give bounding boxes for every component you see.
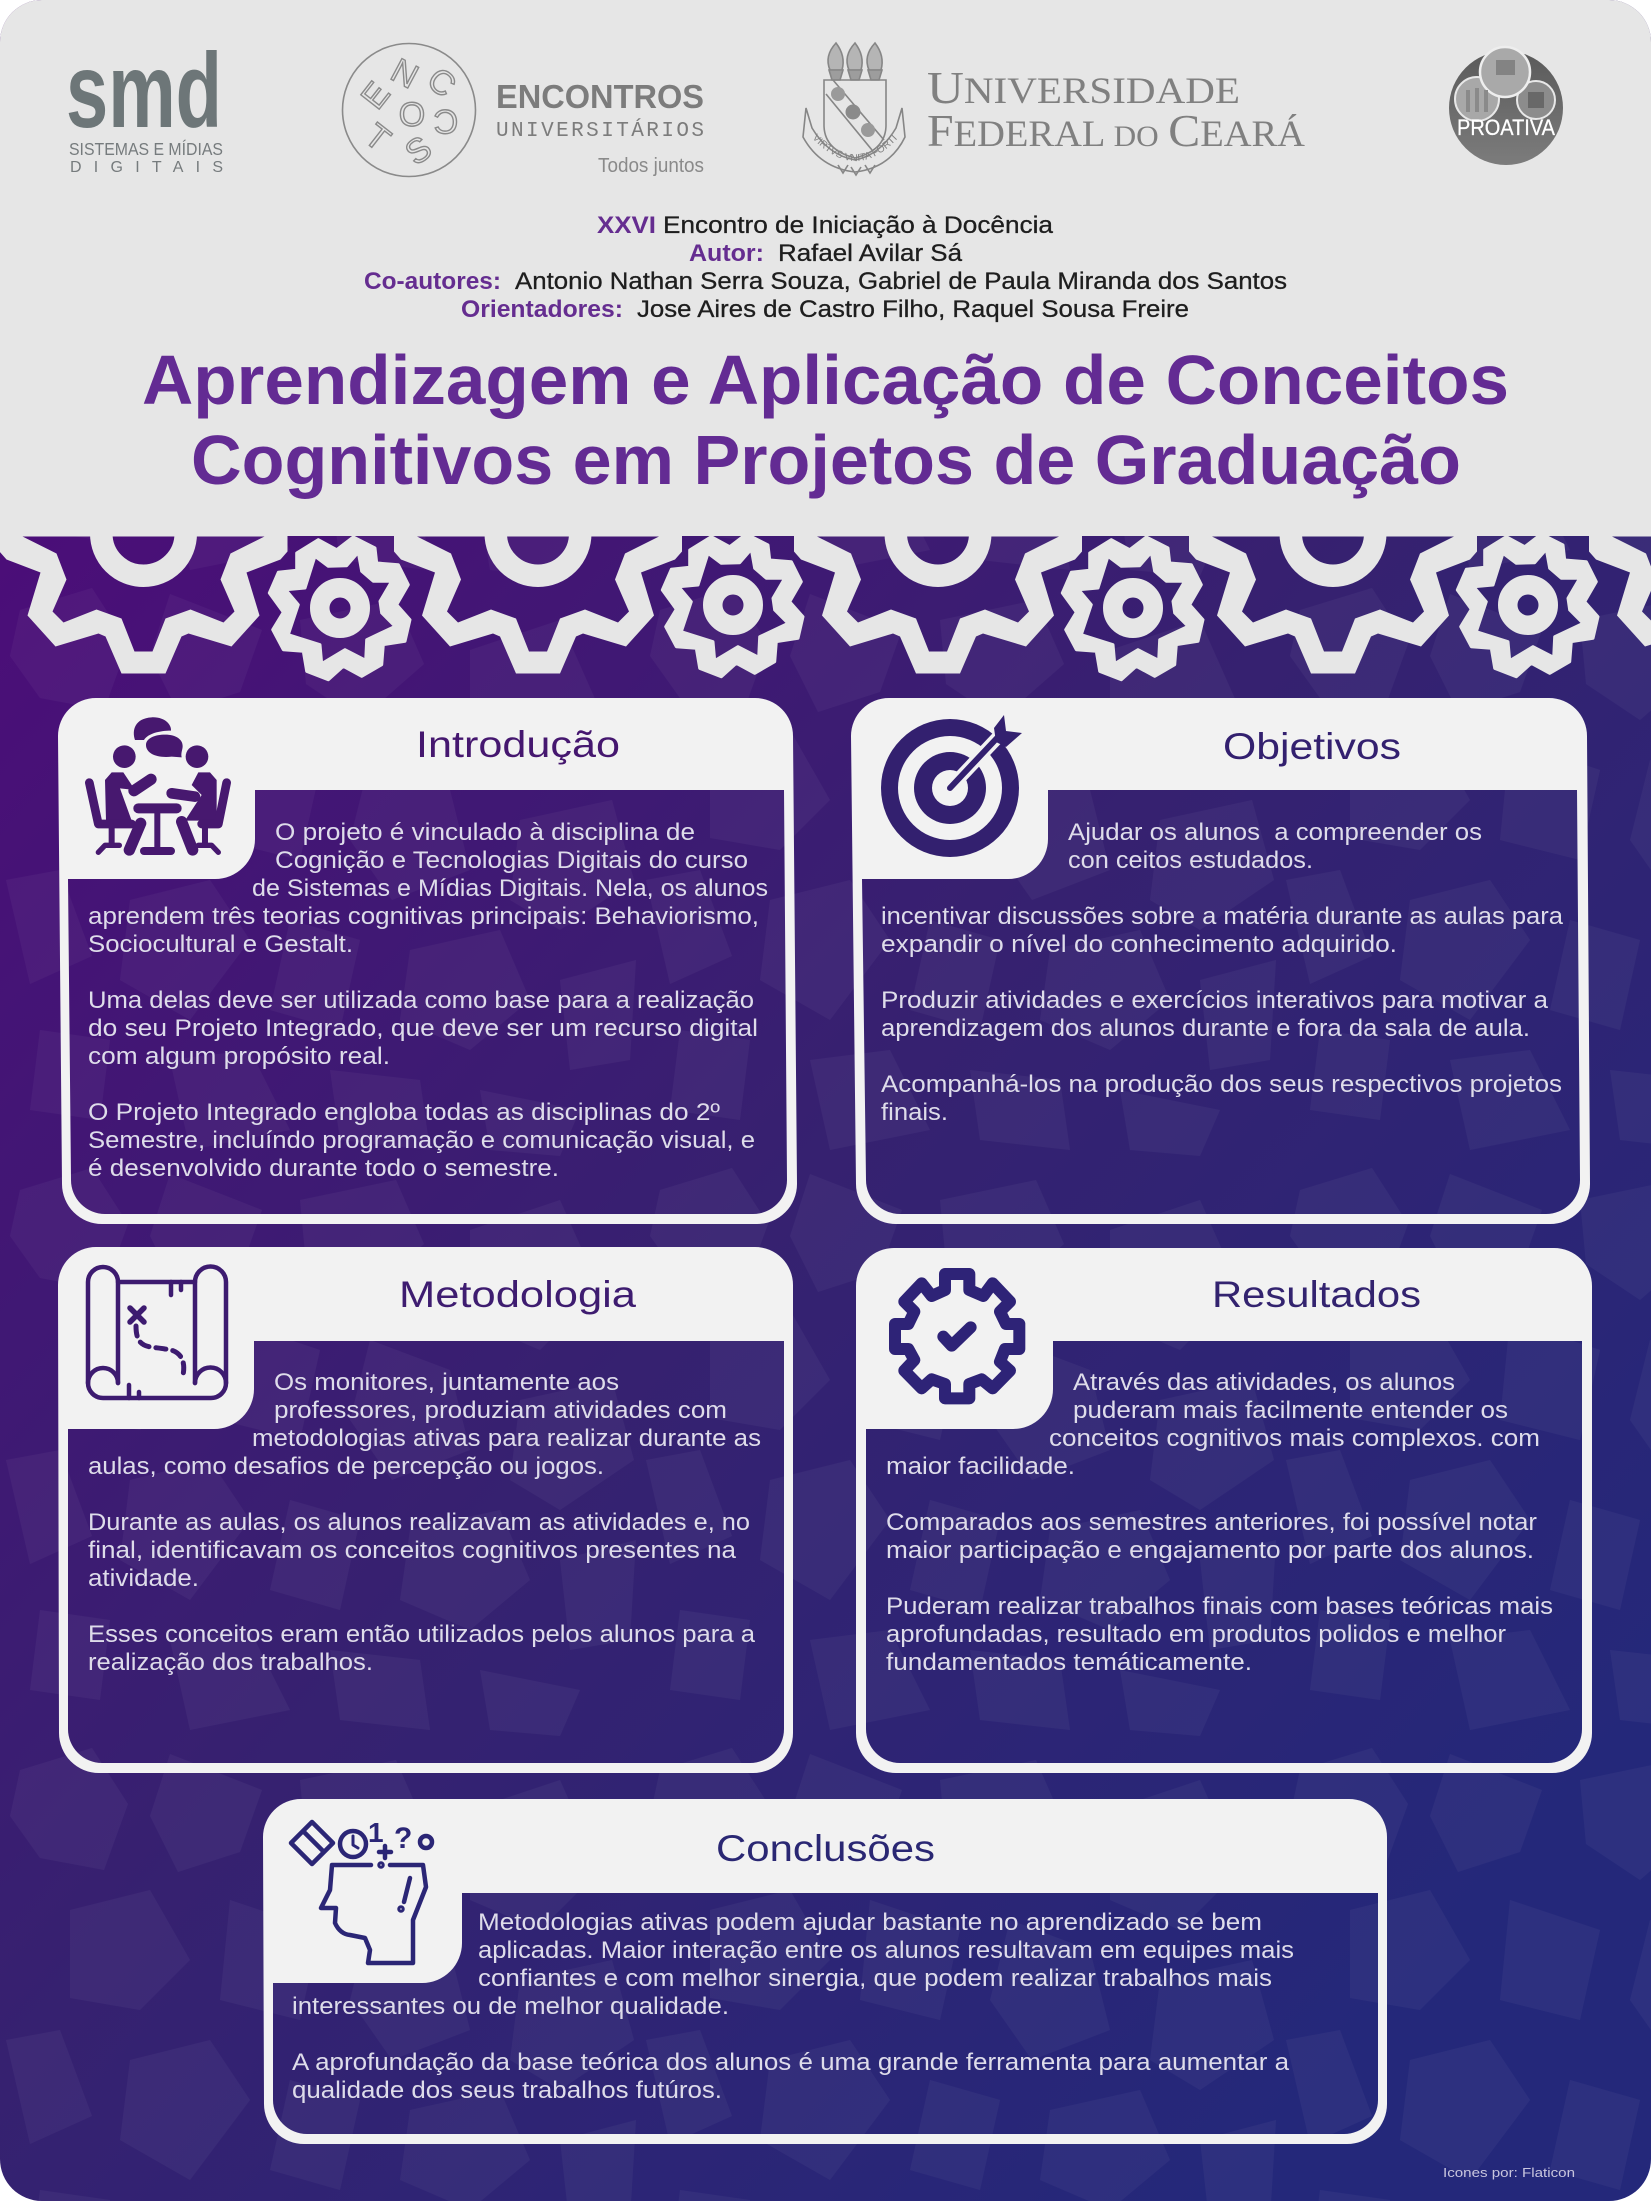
panel: Conclusões [263, 1799, 1387, 2144]
title: Cognitivos em Projetos de Graduação [191, 421, 1461, 499]
heading: Resultados: Resultados [1212, 1274, 1421, 1315]
footer credit: Icones por: Flaticon [1443, 2165, 1575, 2180]
icon: target with arrow [881, 715, 1022, 857]
title [142, 341, 1509, 499]
text: Metodologia body: atividade. [88, 1565, 199, 1592]
text: Resultados body: maior participação e engajamento por parte dos alunos. [886, 1537, 1534, 1564]
icon: head with ideas [291, 1817, 432, 1963]
icon: treasure map [88, 1266, 226, 1398]
logo: Encontros Universitários: UNIVERSITÁRIOS [496, 119, 704, 143]
text: Introdução body: Sociocultural e Gestalt. [88, 931, 353, 958]
text: Resultados body: conceitos cognitivos mais complexos. com [1049, 1425, 1540, 1452]
text: Introdução body: O Projeto Integrado engloba todas as disciplinas do 2º [88, 1099, 720, 1126]
panel: Metodologia [58, 1247, 793, 1773]
panel: Objetivos [851, 698, 1590, 1224]
text: Conclusões body: interessantes ou de melhor qualidade. [292, 1993, 729, 2020]
text: Objetivos body: finais. [881, 1099, 948, 1126]
logo: Encontros Universitários: C [420, 60, 463, 105]
logo: Universidade Federal do Ceará wordmark: FEDERAL DO CEARÁ [927, 105, 1305, 156]
text: Conclusões body [292, 1909, 1294, 2104]
text: Objetivos body: Ajudar os alunos a compreender os [1068, 819, 1482, 846]
text: Introdução body [88, 819, 768, 1182]
title: Aprendizagem e Aplicação de Conceitos [142, 341, 1509, 419]
text: Metodologia body [88, 1369, 761, 1676]
logo: Encontros Universitários: S [398, 129, 439, 173]
event and authors: Antonio Nathan Serra Souza, Gabriel de Paula Miranda dos Santos [515, 268, 1287, 295]
event and authors: Orientadores: [461, 296, 623, 323]
text: Resultados body: puderam mais facilmente entender os [1073, 1397, 1508, 1424]
text: Introdução body: é desenvolvido durante todo o semestre. [88, 1155, 559, 1182]
logo: Encontros Universitários: Todos juntos [598, 155, 704, 177]
heading: Metodologia: Metodologia [399, 1274, 636, 1315]
icon: gear with check mark [895, 1274, 1019, 1398]
logo: Proativa: PROATIVA [1457, 115, 1555, 140]
logo: Encontros Universitários: N [385, 51, 424, 96]
text: Introdução body: Cognição e Tecnologias Digitais do curso [275, 847, 748, 874]
text: Objetivos body: aprendizagem dos alunos durante e fora da sala de aula. [881, 1015, 1530, 1042]
text: Objetivos body: Produzir atividades e exercícios interativos para motivar a [881, 987, 1549, 1014]
text: Objetivos body: incentivar discussões sobre a matéria durante as aulas para [881, 903, 1564, 930]
text: Resultados body: Através das atividades, os alunos [1073, 1369, 1455, 1396]
text: Metodologia body: aulas, como desafios de percepção ou jogos. [88, 1453, 604, 1480]
text: Introdução body: aprendem três teorias cognitivas principais: Behaviorismo, [88, 903, 759, 930]
text: Objetivos body: con ceitos estudados. [1068, 847, 1313, 874]
text: Metodologia body: metodologias ativas para realizar durante as [252, 1425, 761, 1452]
text: Metodologia body: professores, produziam atividades com [274, 1397, 727, 1424]
text: Conclusões body: aplicadas. Maior interação entre os alunos resultavam em equipes mais [478, 1937, 1294, 1964]
text: Metodologia body: realização dos trabalhos. [88, 1649, 373, 1676]
event and authors: Co-autores: [364, 268, 501, 295]
text: Conclusões body: Metodologias ativas podem ajudar bastante no aprendizado se bem [478, 1909, 1262, 1936]
logo: SMD: smd [66, 32, 222, 150]
text: Objetivos body: Acompanhá-los na produção dos seus respectivos projetos [881, 1071, 1562, 1098]
event and authors: XXVI [597, 212, 656, 239]
logo: Universidade Federal do Ceará wordmark: UNIVERSIDADE [927, 62, 1240, 113]
text: Metodologia body: final, identificavam os conceitos cognitivos presentes na [88, 1537, 737, 1564]
logo: SMD: DIGITAIS [70, 159, 223, 176]
text: Metodologia body: Esses conceitos eram então utilizados pelos alunos para a [88, 1621, 756, 1648]
logo: UFC crest [802, 42, 906, 176]
heading: Objetivos: Objetivos [1223, 726, 1401, 767]
logo: Encontros Universitários: T [357, 116, 397, 159]
heading: Introdução: Introdução [416, 724, 620, 765]
logo: Universidade Federal do Ceará wordmark [927, 62, 1305, 156]
logo: Encontros Universitários: O [399, 96, 425, 134]
text: Resultados body [886, 1369, 1553, 1676]
icon: people talking at a table [89, 717, 227, 852]
event and authors: Jose Aires de Castro Filho, Raquel Sousa Freire [637, 296, 1189, 323]
text: Metodologia body: Os monitores, juntamente aos [274, 1369, 619, 1396]
text: Introdução body: Semestre, incluíndo programação e comunicação visual, e [88, 1127, 755, 1154]
logo: Proativa [1449, 47, 1563, 165]
text: Resultados body: fundamentados temáticamente. [886, 1649, 1252, 1676]
logo: SMD: SISTEMAS E MÍDIAS [69, 139, 223, 159]
text: Metodologia body: Durante as aulas, os alunos realizavam as atividades e, no [88, 1509, 750, 1536]
heading: Conclusões: Conclusões [716, 1828, 935, 1869]
text: Conclusões body: qualidade dos seus trabalhos futúros. [292, 2077, 722, 2104]
text: Introdução body: de Sistemas e Mídias Digitais. Nela, os alunos [252, 875, 768, 902]
text: Conclusões body: confiantes e com melhor sinergia, que podem realizar trabalhos mais [478, 1965, 1272, 1992]
text: Resultados body: Puderam realizar trabalhos finais com bases teóricas mais [886, 1593, 1553, 1620]
logo: Encontros Universitários: E [354, 75, 398, 116]
event and authors: Rafael Avilar Sá [778, 240, 963, 267]
logo: SMD [66, 32, 223, 176]
text: Introdução body: do seu Projeto Integrado, que deve ser um recurso digital [88, 1015, 758, 1042]
text: Conclusões body: A aprofundação da base teórica dos alunos é uma grande ferramenta para aumentar a [292, 2049, 1290, 2076]
logo: Encontros Universitários: ENCONTROS [496, 78, 704, 115]
panel: Introdução [58, 698, 797, 1224]
text: Resultados body: aprofundadas, resultado em produtos polidos e melhor [886, 1621, 1506, 1648]
text: Resultados body: maior facilidade. [886, 1453, 1075, 1480]
text: Resultados body: Comparados aos semestres anteriores, foi possível notar [886, 1509, 1537, 1536]
text: Objetivos body: expandir o nível do conhecimento adquirido. [881, 931, 1397, 958]
text: Introdução body: O projeto é vinculado à disciplina de [275, 819, 695, 846]
logo: Encontros Universitários: C [434, 102, 458, 140]
text: Objetivos body [881, 819, 1564, 1126]
text: Introdução body: com algum propósito real. [88, 1043, 390, 1070]
panel: Resultados [856, 1248, 1592, 1773]
event and authors [364, 212, 1287, 323]
event and authors: Encontro de Iniciação à Docência [663, 212, 1054, 239]
text: Introdução body: Uma delas deve ser utilizada como base para a realização [88, 987, 754, 1014]
icon: head with ideas: ? [394, 1822, 412, 1855]
logo: Encontros Universitários [342, 44, 704, 177]
event and authors: Autor: [689, 240, 764, 267]
icon: head with ideas: 1 [368, 1817, 384, 1848]
